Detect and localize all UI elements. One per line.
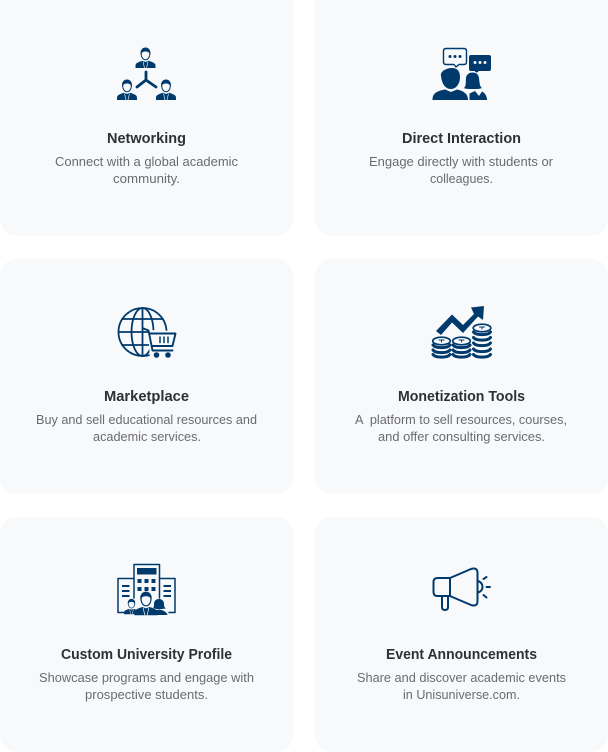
icon: people talking	[432, 48, 491, 100]
text: networking description: Connect with a global academic	[55, 154, 238, 169]
heading: marketplace: Marketplace	[104, 389, 189, 405]
text: networking description: community.	[113, 171, 180, 186]
heading: event announcements: Event Announcements	[386, 647, 537, 663]
text: marketplace description: Buy and sell educational resources and	[36, 412, 257, 427]
text: custom university profile description	[39, 670, 254, 702]
panel: marketplace	[0, 259, 293, 494]
text: event announcements description	[357, 670, 566, 702]
icon: university building and people	[118, 564, 175, 615]
icon: coins and rising arrow	[433, 306, 491, 357]
text: monetization tools description	[355, 412, 567, 444]
heading: direct interaction: Direct Interaction	[402, 131, 521, 147]
panel: direct interaction	[315, 0, 608, 236]
text: event announcements description: in Unisuniverse.com.	[403, 687, 520, 702]
text: networking description	[55, 154, 238, 186]
icon: networking people	[117, 48, 176, 100]
text: direct interaction description: Engage directly with students or	[369, 154, 554, 169]
text: direct interaction description	[369, 154, 554, 186]
panel: custom university profile	[0, 517, 293, 752]
icon: globe and cart	[118, 308, 177, 360]
panel: networking	[0, 0, 293, 236]
panel: event announcements	[315, 517, 608, 752]
text: monetization tools description: A platform to sell resources, courses,	[355, 412, 567, 427]
text: marketplace description: academic services.	[93, 429, 201, 444]
text: monetization tools description: and offer consulting services.	[378, 429, 545, 444]
text: event announcements description: Share and discover academic events	[357, 670, 566, 685]
text: custom university profile description: prospective students.	[85, 687, 208, 702]
heading: networking: Networking	[107, 131, 186, 147]
panel: monetization tools	[315, 259, 608, 494]
icon: megaphone	[434, 568, 490, 610]
text: marketplace description	[36, 412, 257, 444]
heading: monetization tools: Monetization Tools	[398, 389, 525, 405]
text: custom university profile description: Showcase programs and engage with	[39, 670, 254, 685]
text: direct interaction description: colleagues.	[430, 171, 493, 186]
heading: custom university profile: Custom University Profile	[61, 647, 232, 663]
